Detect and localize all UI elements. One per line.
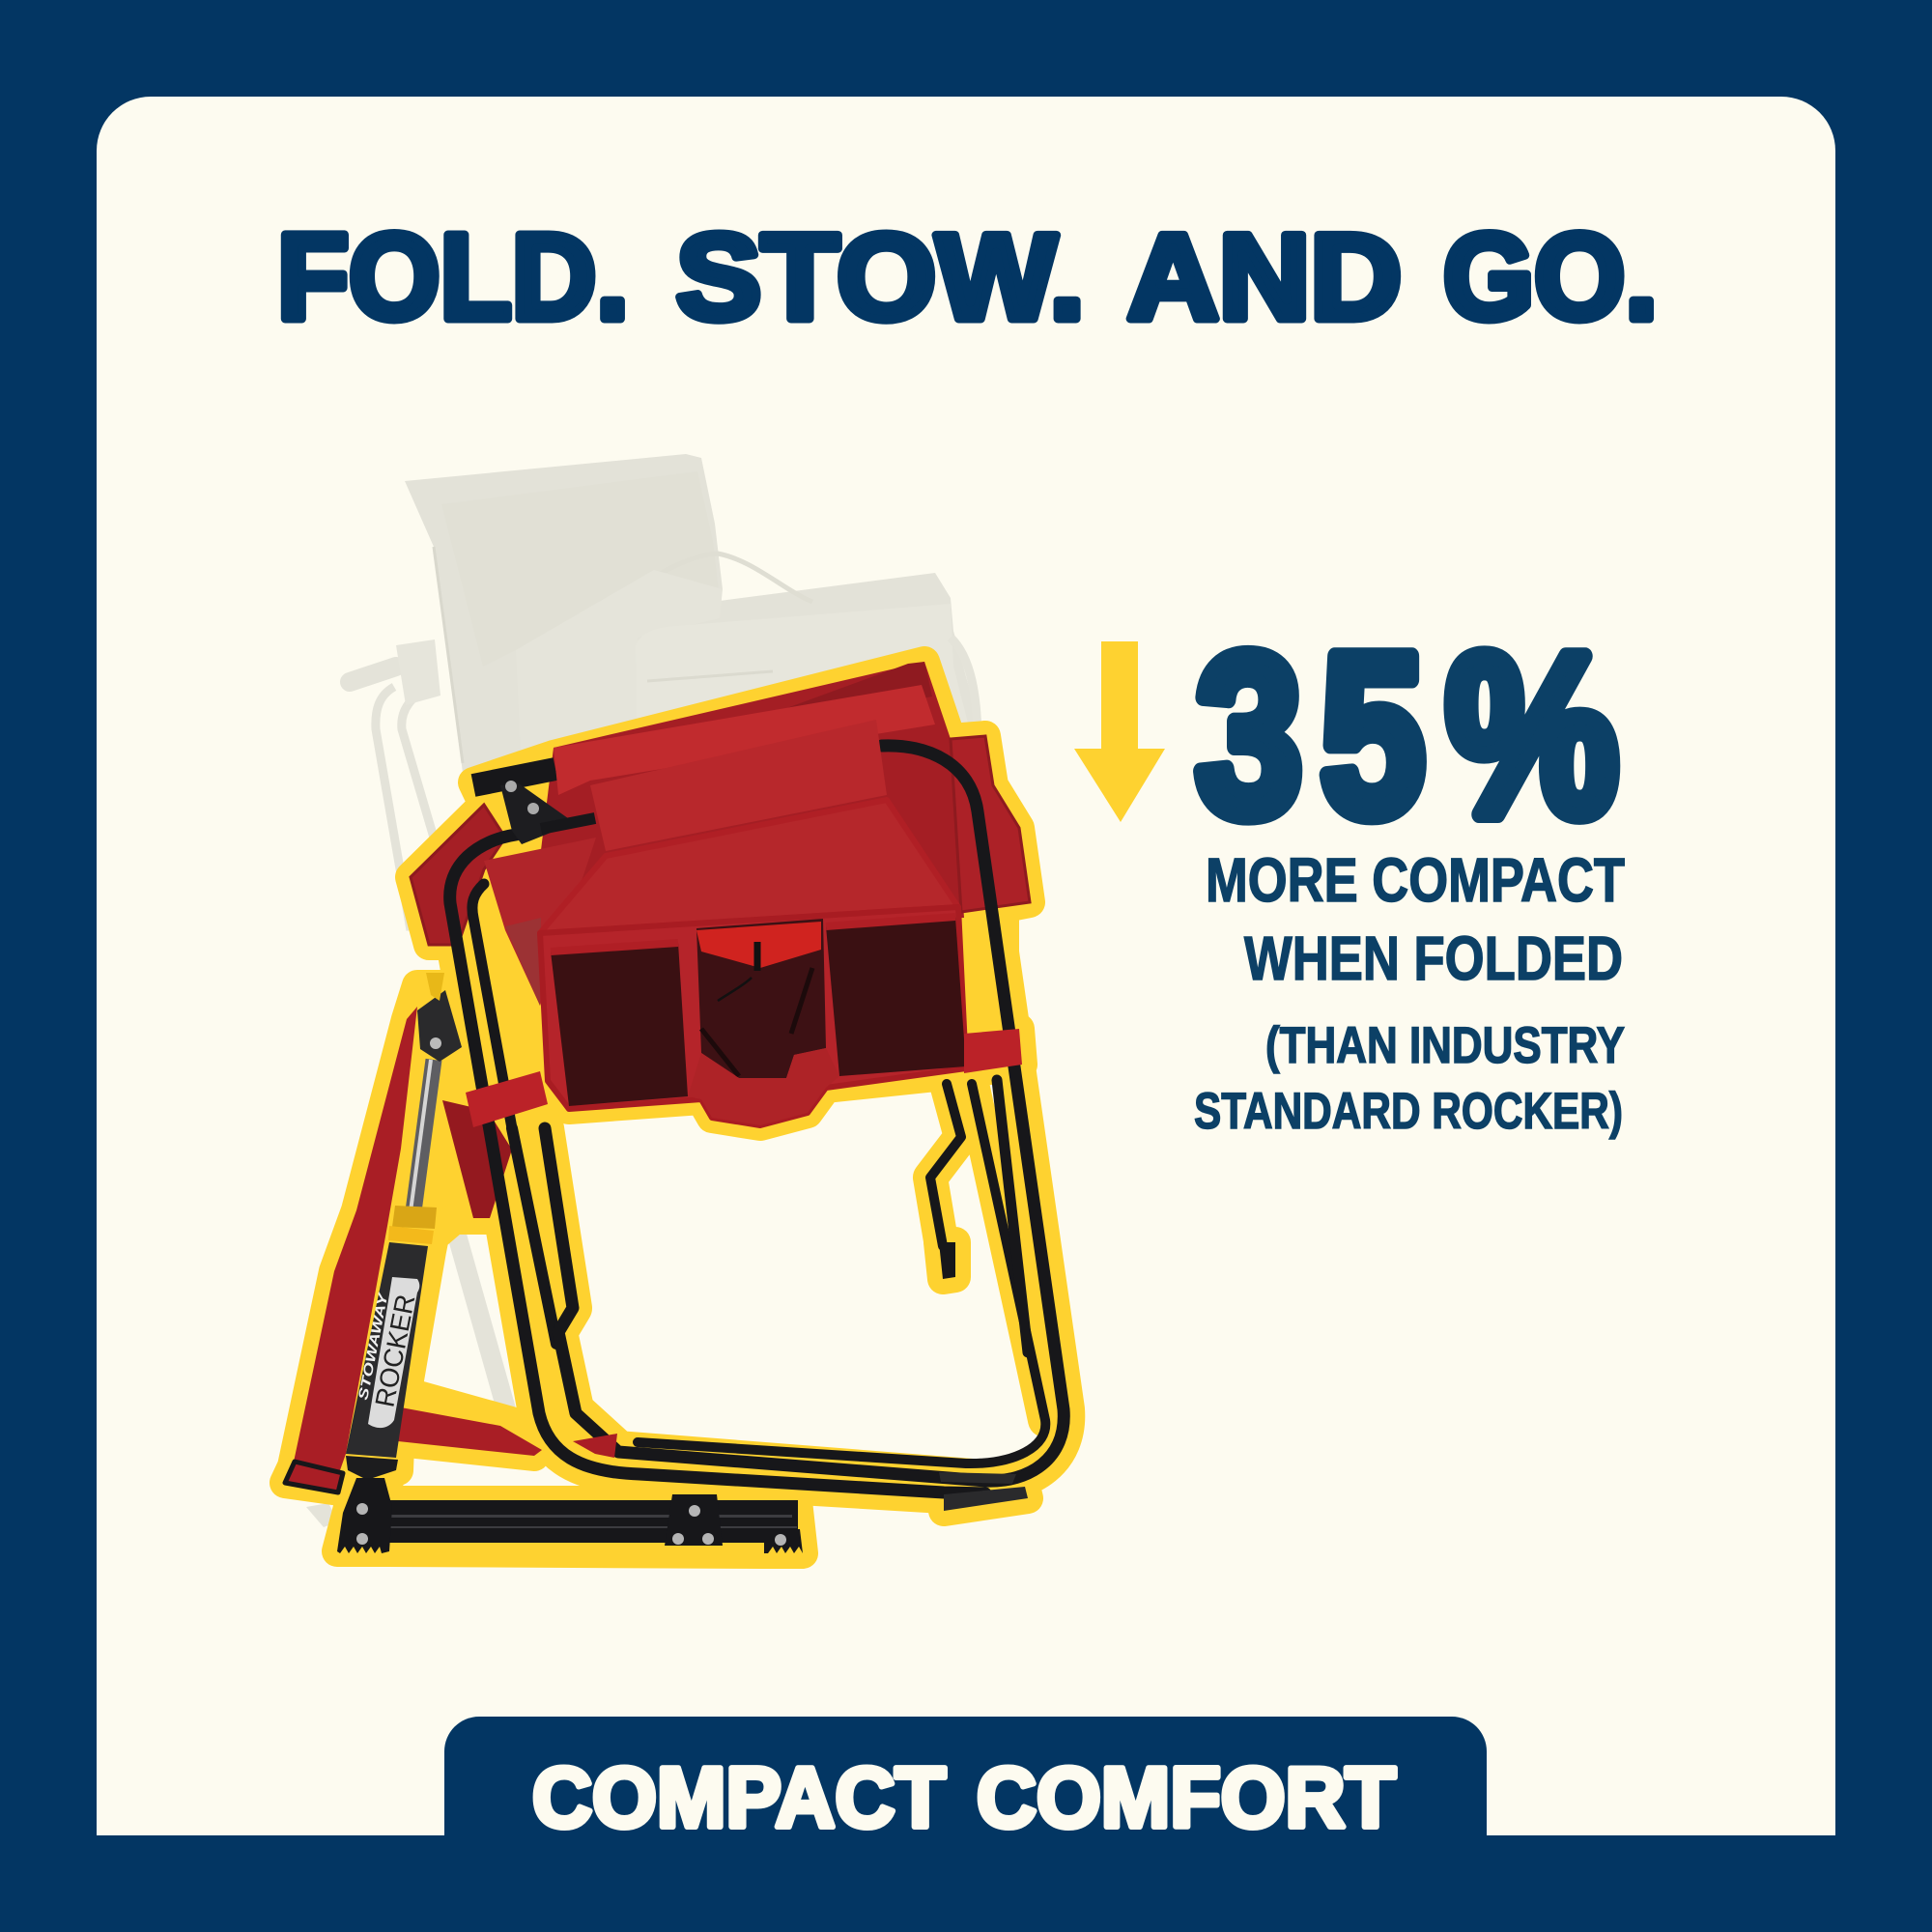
title: AND — [1127, 209, 1402, 345]
tab label — [532, 1749, 1396, 1845]
illustration: black folding frame — [450, 746, 1064, 1511]
tab label: COMPACT — [532, 1749, 946, 1845]
illustration: rocker base — [337, 1478, 803, 1553]
panel: bottom tab — [444, 1717, 1487, 1845]
title: FOLD. — [277, 209, 629, 345]
text: comparison note: STANDARD ROCKER) — [1194, 1083, 1623, 1140]
stat: 35 percent: 5 — [1321, 608, 1425, 864]
illustration: unfolded chair ghost in grey — [306, 454, 978, 1527]
illustration: rocker piston: ROCKER — [369, 1292, 420, 1409]
illustration: rocker piston: STOWAWAY — [355, 1290, 391, 1402]
text: more compact when folded: MORE COMPACT — [1206, 845, 1625, 915]
stat: 35 percent: 3 — [1196, 608, 1302, 864]
title: STOW. — [676, 209, 1085, 345]
title: GO. — [1443, 209, 1658, 345]
illustration: front seat canvas and pockets — [466, 685, 1022, 1127]
text: more compact when folded: WHEN FOLDED — [1244, 923, 1623, 993]
pocket: right mesh — [826, 917, 966, 1076]
text: comparison note — [1194, 1017, 1625, 1140]
pocket: left mesh — [551, 943, 688, 1106]
stat: 35 percent: % — [1446, 608, 1618, 864]
illustration: rocker piston — [346, 973, 462, 1480]
stat: 35 percent — [1196, 608, 1618, 864]
text: more compact when folded — [1206, 845, 1625, 993]
arrow: yellow down arrow — [1074, 641, 1165, 822]
title — [277, 209, 1658, 345]
tab label: COMFORT — [977, 1749, 1396, 1845]
label: rocker — [368, 1277, 419, 1428]
pocket: centre mesh — [696, 919, 826, 1078]
straps: frame tie-downs — [466, 1071, 548, 1127]
text: comparison note: (THAN INDUSTRY — [1265, 1017, 1625, 1074]
illustration: back fabric of folded chair — [411, 662, 1030, 1218]
illustration: lower red shoulder straps — [285, 1007, 617, 1492]
yellow sticker outline around folded chair — [285, 662, 1064, 1553]
